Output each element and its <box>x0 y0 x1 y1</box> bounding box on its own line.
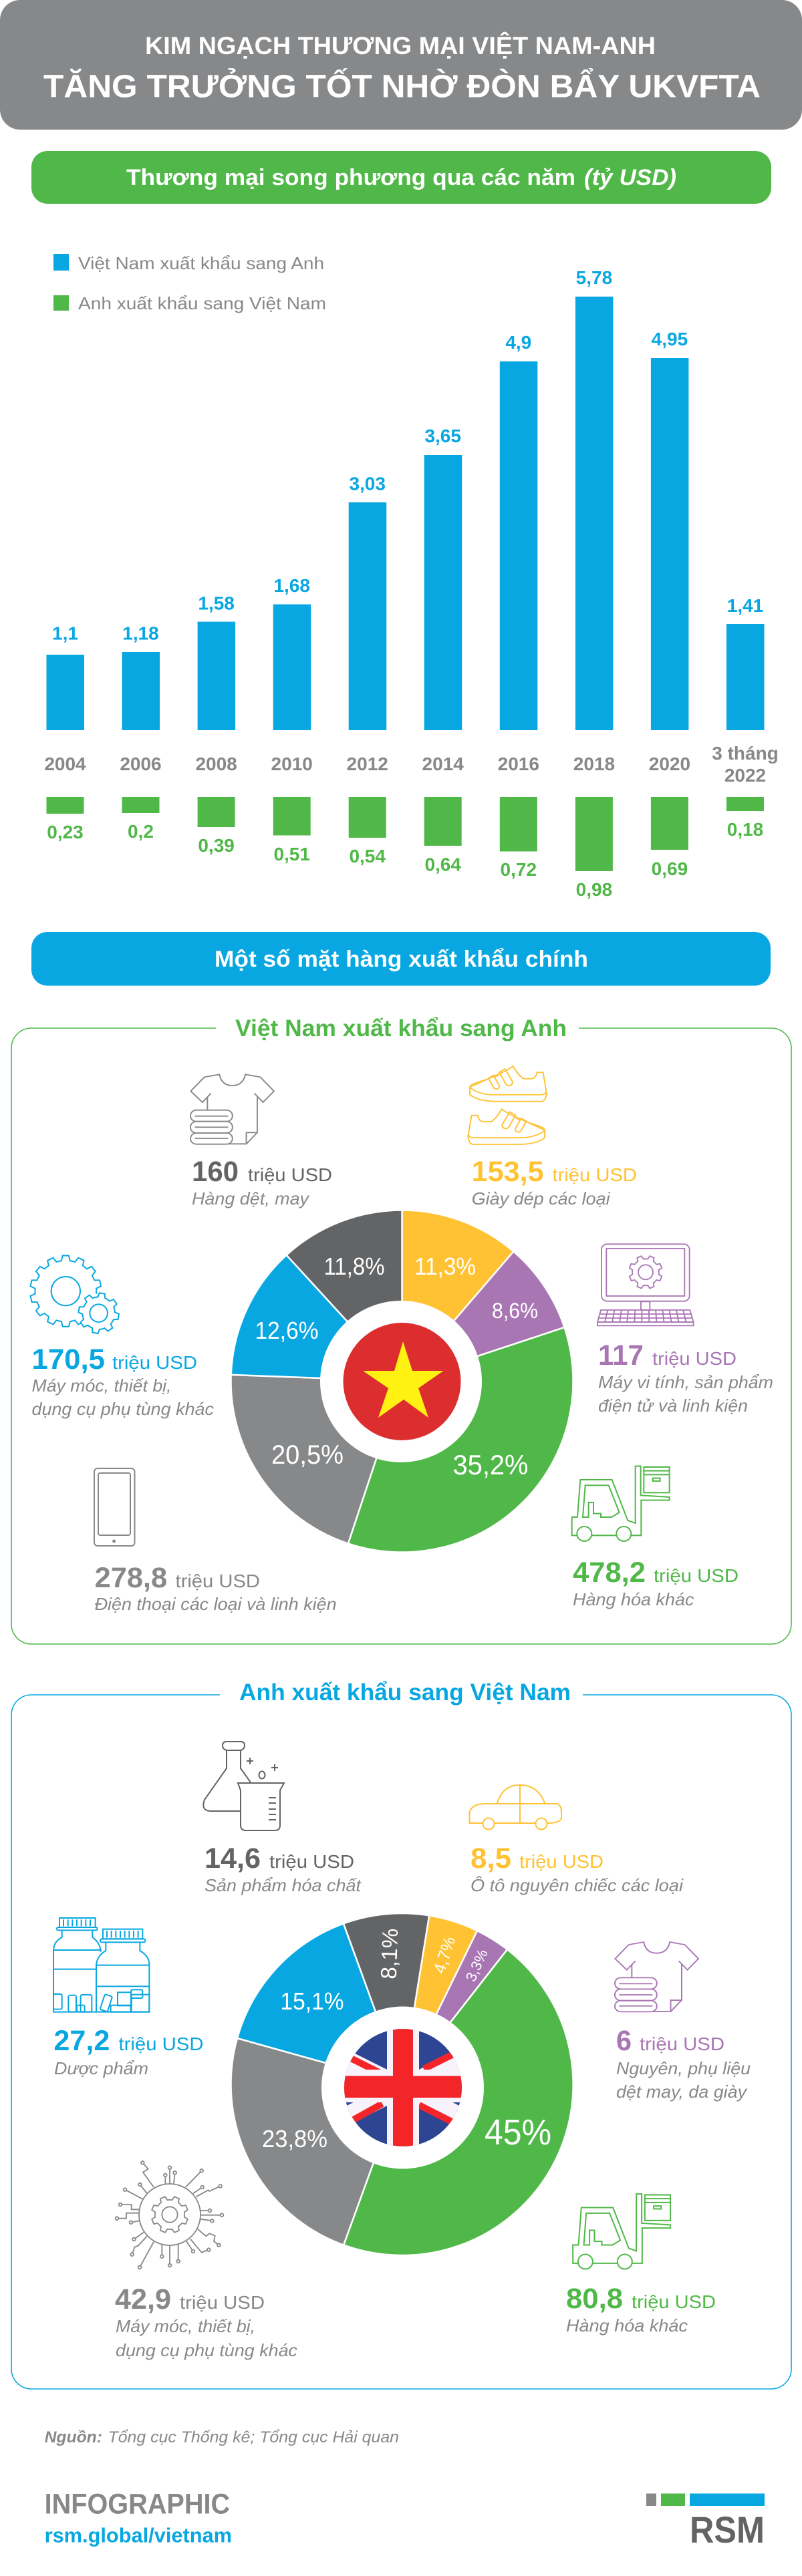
logo: RSM <box>646 2493 765 2551</box>
donut chart: UK exports: 15,1% <box>281 1987 344 2015</box>
item: pharmaceuticals: 27,2 <box>53 2025 110 2057</box>
icon: forklift <box>572 1466 670 1541</box>
bar chart: Vietnam exports to UK: 1,58 <box>198 593 235 613</box>
footer: infographic and website <box>45 2488 232 2547</box>
bar chart: UK exports to Vietnam: 0,23 <box>47 822 84 842</box>
heading: bilateral trade: Thương mại song phương qua các năm <box>126 165 575 190</box>
donut chart: UK exports: 45% <box>485 2112 551 2152</box>
bar chart: UK exports to Vietnam <box>47 797 764 900</box>
item: textile materials: 6 <box>616 2025 632 2057</box>
item: footwear: 153,5 <box>472 1156 544 1188</box>
donut chart: Vietnam exports: 20,5% <box>271 1440 344 1470</box>
chart axis: years: 2010 <box>271 754 313 774</box>
donut chart: UK exports <box>231 1913 573 2255</box>
item: footwear: triệu USD <box>552 1164 637 1185</box>
chart axis: years: 3 tháng <box>712 743 779 764</box>
donut chart: UK exports: 8,1% <box>376 1928 402 1979</box>
item: other goods <box>573 1557 739 1609</box>
source note: Nguồn: <box>45 2428 102 2446</box>
item: chemicals: 14,6 <box>205 1842 261 1875</box>
icon: phone <box>94 1468 135 1546</box>
item: footwear <box>472 1156 637 1209</box>
item: cars: 8,5 <box>471 1842 511 1875</box>
donut chart: Vietnam exports: 12,6% <box>255 1317 318 1344</box>
panel: UK exports to Vietnam <box>11 1679 791 2389</box>
chart legend: Việt Nam xuất khẩu sang Anh <box>78 253 324 273</box>
item: phones: 278,8 <box>95 1562 167 1594</box>
chart axis: years: 2012 <box>347 754 388 774</box>
chart axis: years: 2020 <box>649 754 690 774</box>
item: computers and electronics: Máy vi tính, sản phẩm <box>598 1372 773 1392</box>
bar chart: Vietnam exports to UK: 4,95 <box>652 329 688 349</box>
item: phones <box>95 1562 337 1614</box>
icon: forklift <box>573 2194 670 2269</box>
bar chart: Vietnam exports to UK: 3,03 <box>349 474 386 494</box>
icon: car <box>469 1785 561 1829</box>
icon: Vietnam flag <box>344 1323 461 1440</box>
donut chart: Vietnam exports: 11,8% <box>323 1253 385 1280</box>
chart axis: years: 2014 <box>422 754 464 774</box>
panel title: Việt Nam xuất khẩu sang Anh <box>235 1015 567 1041</box>
item: machinery: triệu USD <box>180 2292 265 2313</box>
chart axis: years: 2018 <box>573 754 615 774</box>
bar chart: UK exports to Vietnam: 0,51 <box>273 844 310 864</box>
item: cars: Ô tô nguyên chiếc các loại <box>471 1875 684 1895</box>
chart axis: years: 2004 <box>44 754 86 774</box>
bar chart: UK exports to Vietnam: 0,18 <box>727 819 763 840</box>
item: textile materials: Nguyên, phụ liệu <box>616 2058 751 2078</box>
item: other goods: 80,8 <box>566 2283 623 2315</box>
item: machinery: 170,5 <box>32 1343 105 1376</box>
panel title: Anh xuất khẩu sang Việt Nam <box>239 1679 571 1706</box>
chart axis: years: 2022 <box>724 765 766 786</box>
donut chart: Vietnam exports: 11,3% <box>414 1253 476 1280</box>
chart axis: years: 2016 <box>498 754 539 774</box>
item: machinery: dụng cụ phụ tùng khác <box>32 1399 214 1419</box>
item: other goods: triệu USD <box>654 1565 739 1586</box>
item: machinery: triệu USD <box>112 1352 197 1373</box>
bar chart: UK exports to Vietnam: 0,64 <box>424 854 461 875</box>
item: phones: Điện thoại các loại và linh kiện <box>95 1594 337 1614</box>
chart legend: Anh xuất khẩu sang Việt Nam <box>78 293 326 313</box>
bar chart: UK exports to Vietnam: 0,98 <box>576 879 612 900</box>
bar chart: Vietnam exports to UK: 5,78 <box>576 267 612 288</box>
chart axis: years: 2008 <box>195 754 237 774</box>
bar chart: UK exports to Vietnam: 0,2 <box>128 821 154 842</box>
bar chart: Vietnam exports to UK: 1,1 <box>52 623 78 644</box>
item: textiles: triệu USD <box>248 1164 332 1185</box>
icon: computer <box>597 1244 694 1325</box>
donut chart: UK exports: 3,3% <box>462 1947 491 1984</box>
item: pharmaceuticals <box>53 2025 204 2078</box>
heading: main export goods <box>31 932 771 986</box>
item: machinery: Máy móc, thiết bị, <box>32 1376 171 1396</box>
footer: infographic and website: rsm.global/vietnam <box>45 2524 232 2547</box>
item: other goods <box>566 2283 716 2336</box>
item: textiles <box>192 1156 332 1209</box>
bar chart: Vietnam exports to UK: 1,18 <box>122 623 159 644</box>
item: pharmaceuticals: triệu USD <box>119 2034 203 2054</box>
item: textile materials: dệt may, da giày <box>616 2082 748 2102</box>
chart axis: years <box>44 743 779 786</box>
bar chart: UK exports to Vietnam: 0,72 <box>501 859 537 880</box>
donut chart: UK exports: 4,7% <box>430 1935 459 1975</box>
item: textile materials <box>616 2025 751 2102</box>
donut chart: Vietnam exports: 35,2% <box>453 1449 528 1480</box>
item: chemicals <box>205 1842 362 1895</box>
item: machinery: 42,9 <box>115 2283 171 2315</box>
bar chart: Vietnam exports to UK: 4,9 <box>505 332 531 353</box>
item: chemicals: triệu USD <box>269 1851 354 1872</box>
bar chart: Vietnam exports to UK: 3,65 <box>424 426 461 446</box>
bar chart: UK exports to Vietnam: 0,39 <box>198 835 235 856</box>
logo: RSM: RSM <box>690 2509 765 2551</box>
source note: Tổng cục Thống kê; Tổng cục Hải quan <box>108 2428 399 2446</box>
title banner: TĂNG TRƯỞNG TỐT NHỜ ĐÒN BẨY UKVFTA <box>43 68 761 104</box>
panel: Vietnam exports to UK <box>11 1015 791 1644</box>
item: textiles: 160 <box>192 1156 239 1188</box>
title banner: KIM NGẠCH THƯƠNG MẠI VIỆT NAM-ANH <box>145 31 656 59</box>
donut chart: UK exports: 23,8% <box>262 2125 327 2152</box>
item: computers and electronics <box>598 1339 773 1416</box>
chart legend <box>53 253 326 313</box>
icon: shoes <box>468 1066 547 1144</box>
item: computers and electronics: triệu USD <box>652 1348 737 1369</box>
icon: medicine bottles <box>53 1918 149 2012</box>
bar chart: UK exports to Vietnam: 0,69 <box>652 858 688 879</box>
item: textiles: Hàng dệt, may <box>192 1188 310 1209</box>
item: cars <box>471 1842 684 1895</box>
item: cars: triệu USD <box>519 1851 604 1872</box>
item: machinery <box>115 2283 297 2360</box>
item: other goods: Hàng hóa khác <box>566 2315 688 2336</box>
item: computers and electronics: 117 <box>598 1339 644 1372</box>
chart axis: years: 2006 <box>120 754 162 774</box>
icon: t-shirt <box>190 1074 274 1144</box>
item: other goods: Hàng hóa khác <box>573 1589 694 1609</box>
item: chemicals: Sản phẩm hóa chất <box>205 1875 362 1895</box>
icon: gears <box>29 1256 122 1336</box>
icon: circuit gear <box>116 2161 223 2269</box>
item: machinery: Máy móc, thiết bị, <box>116 2316 255 2336</box>
icon: chemistry flask <box>203 1742 284 1830</box>
bar chart: Vietnam exports to UK: 1,68 <box>273 575 310 596</box>
bar chart: Vietnam exports to UK: 1,41 <box>727 595 763 616</box>
item: other goods: triệu USD <box>632 2291 716 2312</box>
heading: bilateral trade <box>31 151 771 204</box>
bar chart: Vietnam exports to UK <box>47 267 765 730</box>
item: phones: triệu USD <box>175 1571 260 1591</box>
heading: main export goods: Một số mặt hàng xuất khẩu chính <box>215 947 588 972</box>
item: footwear: Giày dép các loại <box>472 1188 611 1209</box>
footer: infographic and website: INFOGRAPHIC <box>45 2488 230 2520</box>
icon: t-shirt and fabric <box>615 1942 698 2011</box>
item: other goods: 478,2 <box>573 1557 646 1589</box>
item: machinery <box>32 1343 214 1419</box>
item: machinery: dụng cụ phụ tùng khác <box>116 2340 297 2360</box>
item: textile materials: triệu USD <box>640 2034 724 2054</box>
item: computers and electronics: điện tử và linh kiện <box>598 1396 748 1416</box>
item: pharmaceuticals: Dược phẩm <box>54 2058 148 2078</box>
donut chart: Vietnam exports: 8,6% <box>492 1299 538 1323</box>
icon: UK flag <box>344 2029 462 2146</box>
bar chart: UK exports to Vietnam: 0,54 <box>349 846 386 866</box>
title banner <box>0 0 802 130</box>
donut chart: Vietnam exports <box>231 1210 573 1553</box>
heading: bilateral trade: (tỷ USD) <box>584 165 676 190</box>
